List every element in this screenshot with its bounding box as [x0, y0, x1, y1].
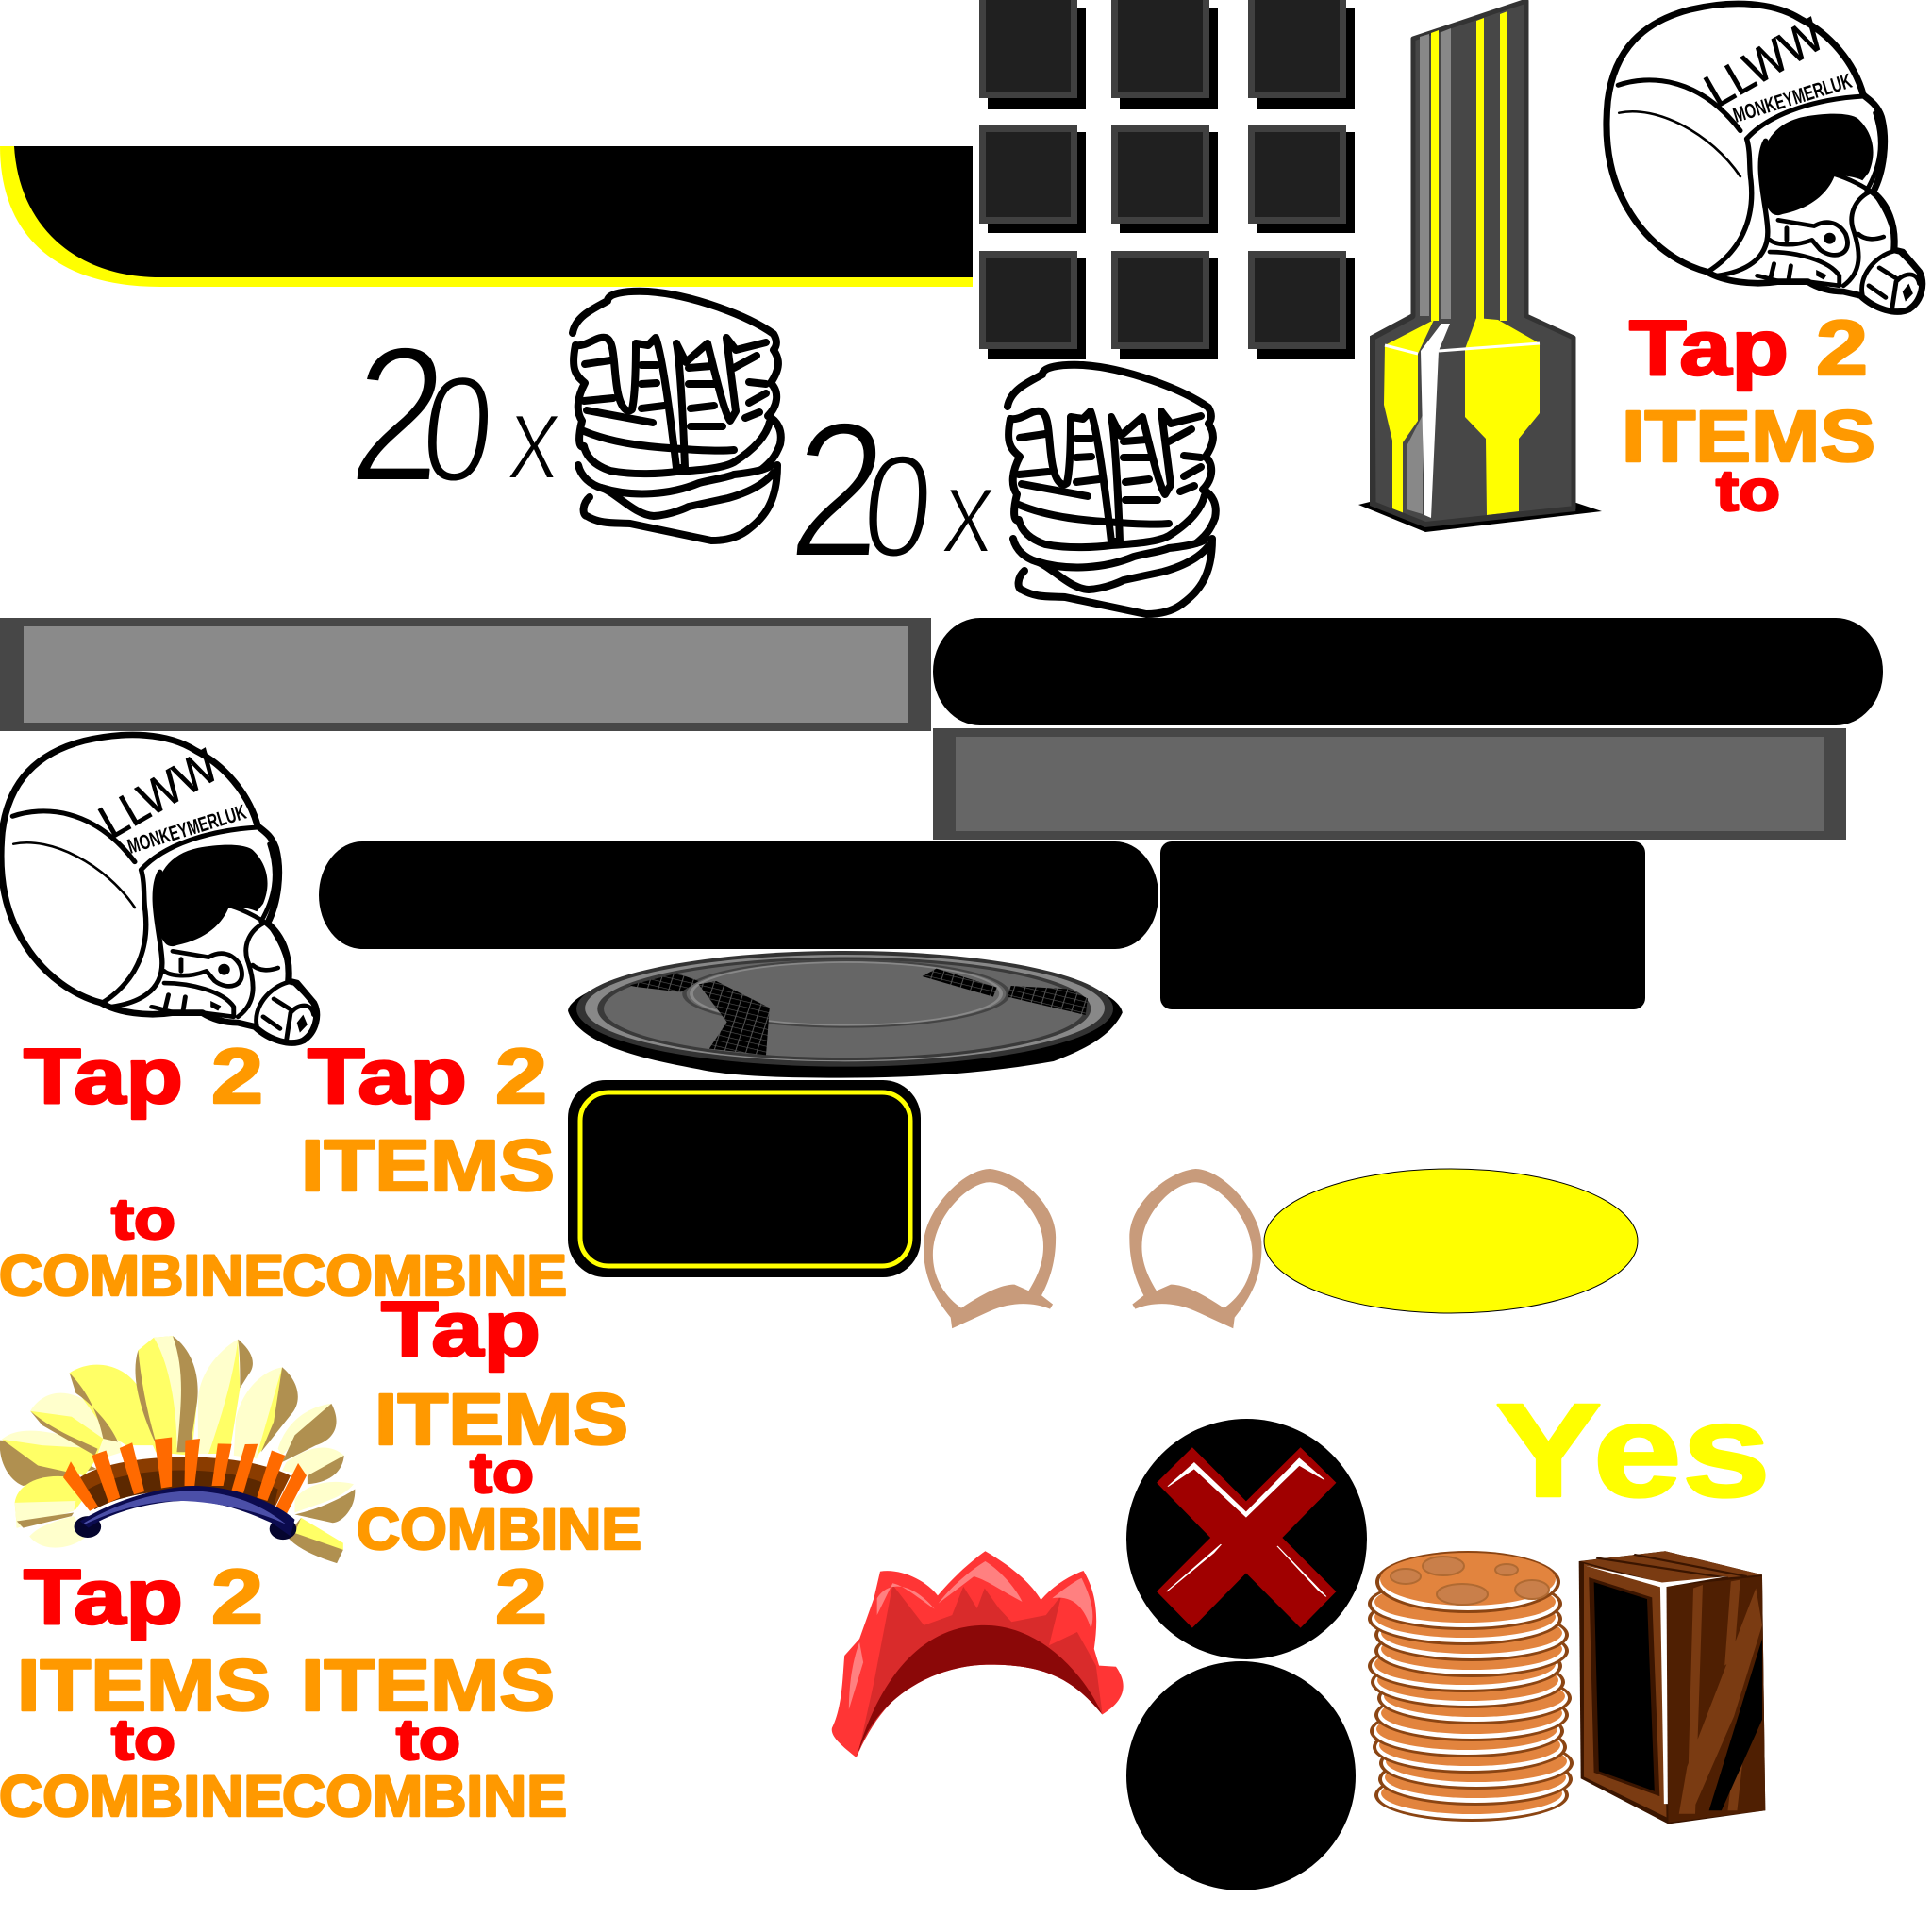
text block: Tap ITEMS to COMBINE: Tap: [381, 1285, 541, 1373]
label: Yes: Yes: [1495, 1375, 1771, 1524]
helmet scribble: Monkey: MONKEYMERLUK: [1730, 69, 1855, 127]
text block: Tap 2 to COMBINE, column one: to: [111, 1187, 175, 1251]
text block: Tap 2 ITEMS COMBINE, column two: 2: [495, 1032, 547, 1120]
text block: Tap 2 ITEMS to, top right: ITEMS: [1622, 396, 1875, 477]
text block: Tap 2 ITEMS COMBINE, column two: COMBINE: [282, 1243, 567, 1307]
text block: Tap 2 ITEMS COMBINE, column two: [282, 1032, 567, 1307]
icon: close button with red X: [1126, 1419, 1367, 1659]
text block: Tap 2 ITEMS to, top right: to: [1716, 458, 1780, 523]
icon: coloured pancake stack: [1368, 1551, 1574, 1822]
text block: Tap 2 ITEMS to, top right: [1622, 304, 1875, 523]
text block: 2 ITEMS to COMBINE, right: ITEMS: [301, 1645, 555, 1726]
helmet icon, top right: [1607, 4, 1923, 311]
label: second 20x: 2: [783, 382, 893, 598]
yellow ellipse: [1264, 1169, 1638, 1313]
black rounded panel with yellow outline: [568, 1080, 921, 1277]
text block: 2 ITEMS to COMBINE, left: 2: [211, 1553, 263, 1641]
text block: Tap ITEMS to COMBINE: COMBINE: [357, 1497, 641, 1561]
text block: Tap 2 to COMBINE, column one: 2: [211, 1032, 263, 1120]
text block: Tap 2 ITEMS COMBINE, column two: Tap: [308, 1032, 467, 1120]
icon: striped tower: [1358, 1, 1602, 532]
text block: 2 ITEMS to COMBINE, left: COMBINE: [0, 1764, 284, 1828]
icon: wooden crate: [1579, 1551, 1765, 1824]
text block: Tap ITEMS to COMBINE: to: [470, 1441, 534, 1505]
text block: 2 ITEMS to COMBINE, left: to: [111, 1707, 175, 1772]
text block: Tap ITEMS to COMBINE: ITEMS: [375, 1379, 628, 1460]
icon: feather headdress: [0, 1336, 355, 1563]
text block: Tap 2 ITEMS to, top right: 2: [1816, 304, 1868, 391]
label: second 20x: x: [937, 442, 1002, 579]
text block: Tap 2 ITEMS to, top right: Tap: [1629, 304, 1789, 391]
grid of nine dark inventory slots: [983, 0, 1355, 359]
icon: metal disc platform: [568, 951, 1123, 1078]
dark gray bar: [933, 728, 1846, 840]
top banner: black bar with yellow curved edge: [0, 146, 973, 287]
text block: 2 ITEMS to COMBINE, right: 2: [495, 1553, 547, 1641]
black circle button: [1126, 1661, 1356, 1890]
helmet scribble: LLWW: LLWW: [1696, 8, 1833, 118]
black rounded rectangle: [1160, 841, 1645, 1009]
icon: left ear: [924, 1169, 1056, 1328]
helmet scribble: Monkey: MONKEYMERLUK: [125, 800, 249, 858]
icon: right ear: [1129, 1169, 1261, 1328]
helmet icon, left: [1, 735, 317, 1042]
text block: Tap ITEMS to COMBINE: [357, 1285, 641, 1561]
text block: 2 ITEMS to COMBINE, right: COMBINE: [282, 1764, 567, 1828]
icon: red feather crown: [832, 1551, 1124, 1757]
label: first 20x: 2: [343, 307, 454, 523]
text block: 2 ITEMS to COMBINE, left: [0, 1553, 284, 1828]
light gray bar: [0, 618, 931, 731]
text block: 2 ITEMS to COMBINE, left: ITEMS: [17, 1645, 271, 1726]
text block: 2 ITEMS to COMBINE, right: to: [396, 1707, 460, 1772]
text block: Tap 2 ITEMS COMBINE, column two: ITEMS: [301, 1125, 555, 1207]
black pill, middle: [319, 841, 1158, 949]
icon: first pancake stack doodle: [573, 291, 781, 541]
black pill, upper right: [933, 618, 1883, 725]
label: first 20x: x: [503, 369, 567, 506]
label: first 20x: 0: [415, 344, 501, 513]
text block: Tap 2 to COMBINE, column one: COMBINE: [0, 1243, 284, 1307]
label: second 20x: 0: [857, 424, 940, 588]
text block: Tap 2 to COMBINE, column one: Tap: [24, 1032, 183, 1120]
text block: 2 ITEMS to COMBINE, left: Tap: [24, 1553, 183, 1641]
text block: Tap 2 to COMBINE, column one: [0, 1032, 284, 1307]
text block: 2 ITEMS to COMBINE, right: [282, 1553, 567, 1828]
helmet scribble: LLWW: LLWW: [91, 739, 227, 849]
icon: second pancake stack doodle: [1008, 365, 1216, 614]
